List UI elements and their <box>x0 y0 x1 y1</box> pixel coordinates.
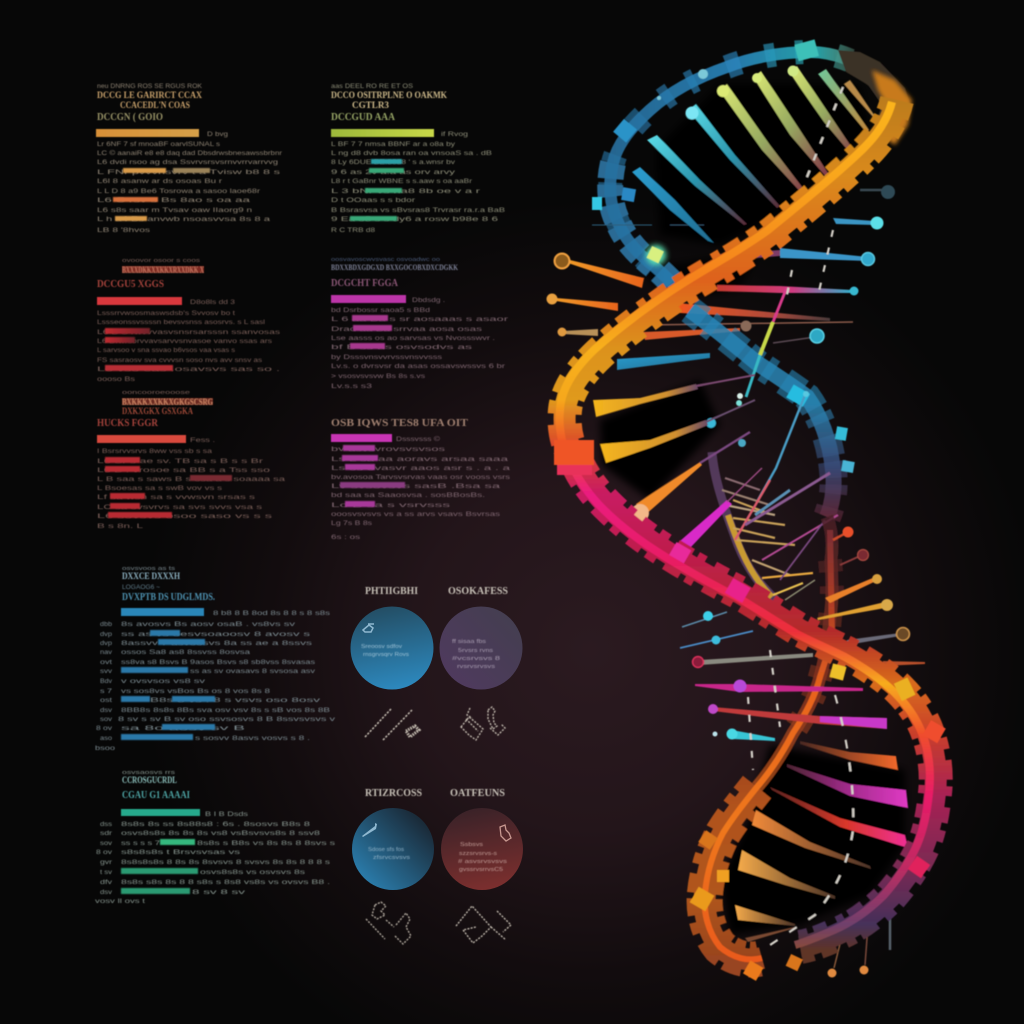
lower back strand <box>705 517 832 960</box>
black voids inside helix loops <box>600 85 905 935</box>
first red heading <box>97 258 204 290</box>
first magenta heading <box>331 257 459 289</box>
blue block bar <box>121 608 204 616</box>
icon: dotted figures <box>461 707 505 740</box>
second red text lines: Fess . <box>190 437 215 444</box>
teal block text lines: 8s8s 8s ss 8s88s8 : 6s . 8sosvs B8s 8 <box>121 821 311 828</box>
teal block inline bars <box>121 839 198 894</box>
orange block text lines: LC © aanaiR e8 e8 daq dad Dbsdrwsbnesawssbrbnr <box>97 149 283 157</box>
orange block text lines: D bvg <box>207 131 228 138</box>
first red inline bars <box>105 328 173 371</box>
second magenta text lines: Lv svsovsvs sasB .Bsa sa <box>331 483 501 490</box>
orange block text lines: L FNr pvvvnsvrv t a Tvisw b8 8 s <box>97 169 281 176</box>
blue block text lines: 8 sv s sv B sv oso ssvsosvs 8 B 8ssvsvsvs v <box>118 716 336 723</box>
blue block heading: DXXCE DXXXH <box>122 571 180 581</box>
panel: circle four <box>441 787 523 890</box>
orange block text lines: Lr 6NF 7 sf mnoaBF oarvlSUNAL s <box>97 141 221 148</box>
first red text lines: L sarvsoo v sna ssvao b6vsos vaa vsas s <box>97 347 236 354</box>
green block heading: aas DEEL RO RE ET OS <box>331 84 413 90</box>
upper left pins <box>546 254 644 336</box>
panel: first red data block <box>97 258 281 383</box>
middle back strand <box>690 310 855 517</box>
lower loop rungs <box>735 741 908 942</box>
second magenta text lines <box>331 435 511 541</box>
blue block text lines: ossos Sa8 as8 8ssvss 8osvsa <box>121 649 251 656</box>
panel: green data block <box>331 84 505 234</box>
second magenta text lines: Lg 7s B 8s <box>331 520 373 527</box>
orange block text lines: L6 dvdi rsoo ag dsa Ssvrvsrsvsrnvvrrvarrvvg <box>97 159 279 166</box>
first magenta text lines: > vsosvsvsvw Bs 8s s.vs <box>331 373 426 380</box>
teal block text lines: dss <box>100 821 113 828</box>
teal block text lines <box>95 811 336 905</box>
blue block text lines: Bdv <box>100 678 113 685</box>
green block bar <box>331 129 434 137</box>
green block heading <box>331 84 447 123</box>
circle two text <box>452 639 500 670</box>
second magenta text lines: ooosvsvsvs vs a ss arvs vsavs Bsvrsas <box>331 511 501 518</box>
second red text lines: LC sa ovsvrvs sa svs svvs vsa s <box>97 504 263 511</box>
orange block text lines: L h a4 Bs anvwb nsoasvvsa 8s 8 a <box>97 216 271 223</box>
strand blocks: upper blue <box>592 39 819 225</box>
first red text lines: Lssseonssvssssn bevsvsnss asosrvs. s L sasl <box>97 319 266 326</box>
blue block text lines: 8assvv 7 asvoosvs 8a ss ae a 8ssvs <box>121 640 313 647</box>
second magenta text lines: bd saa sa Saaosvsa . sosBBosBs. <box>331 492 485 499</box>
teal block bar <box>121 809 200 816</box>
second magenta bar <box>331 434 392 442</box>
teal block text lines: 8s8s8s8s 8 8s 8s 8svsvs 8 svsvs 8s 8s 8 8 8 s <box>121 859 331 866</box>
green block inline bars <box>350 159 404 221</box>
second red text lines: L6 sovsvs osoo saso vs s s <box>97 513 274 520</box>
first red bar <box>97 297 182 305</box>
orange block bar <box>96 129 199 137</box>
circle two title: OSOKAFESS <box>448 585 508 597</box>
circle three text <box>368 847 410 861</box>
blue block text lines: dbb <box>100 621 112 628</box>
first red text lines: D8o8ls dd 3 <box>190 299 235 306</box>
first red text lines: oooso Bs <box>97 376 136 383</box>
glowing green node <box>646 245 666 265</box>
second red heading: ooncooroeooose <box>122 390 190 396</box>
panel: circle one <box>350 585 434 690</box>
panel: circle three <box>352 787 434 890</box>
blue block text lines: 8BB8s 8s8s 8Bs sva osv vsv 8s s sB vos 8s 8B <box>121 707 330 714</box>
second red text lines: L B saa s saws B s osa a s soaaaa sa <box>97 476 286 483</box>
front strand <box>560 100 936 947</box>
first magenta text lines: L 6 aa Ba s sr aosaaas s asaor <box>331 316 510 323</box>
teal block text lines: sdr <box>100 830 113 837</box>
blue block text lines <box>95 610 336 752</box>
panel: blue data block <box>95 566 336 752</box>
teal block text lines: osvs8s8s vs osvsvs 8s <box>200 869 306 876</box>
blue block heading: LOGAOG6 ~ <box>122 584 160 591</box>
blue block heading <box>122 566 215 603</box>
icon: dotted diagonal lines <box>365 709 419 740</box>
first red text lines: FS sasraosv sva cvvvsn soso nvs avv snsv as <box>97 357 263 364</box>
teal block text lines: dfv <box>100 879 113 886</box>
lower right pins <box>817 526 925 666</box>
blue block text lines: dsv <box>100 707 113 714</box>
blue block text lines: v ovsvsos vs8 sv <box>121 678 206 685</box>
blue block text lines: bsoo <box>95 745 116 752</box>
teal block text lines: B I B Dsds <box>205 811 249 818</box>
orange block inline bars <box>113 168 210 221</box>
blue block text lines: s 7 <box>100 688 113 695</box>
blue block text lines: vs sos8vs vsBos Bs os 8 vos 8s 8 <box>121 688 271 695</box>
first magenta inline bars <box>350 315 392 349</box>
teal block text lines: 8 ov <box>96 849 113 856</box>
icon: dotted map shapes <box>366 902 411 944</box>
green block text lines: 9 Ea o8 s s dy6 a rosw b98e 8 6 <box>331 216 499 223</box>
blue block text lines: sa 8o aosv sv B <box>121 725 245 732</box>
first magenta heading: oosvavoscwvsvasc osvoadwc oo <box>331 257 440 263</box>
first magenta text lines: Dbdsdg . <box>412 297 445 304</box>
circle two text: rvsrvsrvsvs <box>457 664 495 670</box>
green block text lines: R C TRB d8 <box>331 227 375 234</box>
green block text lines: L 3 bNr vs na8 8b oe v a r <box>331 188 482 195</box>
panel: orange data block <box>96 84 283 234</box>
blue block text lines: 8 b8 8 B 8od 8s 8 8 s 8 s8s <box>213 610 331 617</box>
green block text lines: 8 Ly 6DUE BE.8088 ' s a.wnsr bv <box>331 159 456 166</box>
orange block text lines: L6 C rsv s Bs 8ao s oa aa <box>97 197 251 204</box>
first magenta heading: DCGCHT FGGA <box>331 277 398 289</box>
green block heading: DCCO OSITRPLNE O OAKMK <box>331 90 447 100</box>
orange block heading: CCACEDL'N COAS <box>120 100 190 110</box>
chart: DNA double helix <box>546 39 946 981</box>
panel: circle two <box>440 585 522 690</box>
orange block heading: neu DNRNG ROS SE RGUS ROK <box>97 84 202 90</box>
second red text lines: L6 B . vrosoe sa BB s a Tss sso <box>97 467 271 474</box>
blue block text lines: ost <box>100 697 112 704</box>
teal block text lines: gvr <box>100 859 113 866</box>
blue block inline bars <box>121 630 215 740</box>
first red heading: BXXXDKKXXKKXRXXDKK X <box>122 265 204 275</box>
second magenta heading: OSB IQWS TES8 UFA OIT <box>331 417 469 429</box>
blue block text lines: ss as sv ovasavs 8 svsosa asv <box>190 668 316 675</box>
green block heading: DCCGUD AAA <box>331 111 395 123</box>
green block text lines <box>331 131 505 234</box>
second red text lines: Lf sa wsn sa s vvwsvn srsas s <box>97 494 256 501</box>
second red heading: BXKKKXXKKXGKGSCSRG <box>122 397 213 407</box>
rainbow center line <box>746 287 805 500</box>
circle two text: 5rvsrs rvns <box>458 648 493 654</box>
circle four text: szzsrvsrvs-s <box>459 851 497 857</box>
central small ladder <box>712 452 838 600</box>
first magenta heading: BDXXBDXGDGXD BXXGOCOBXDXCDGKK <box>331 263 459 272</box>
first magenta text lines: Drad aa Ba srrvaa aosa osas <box>331 326 483 333</box>
teal block text lines: 8s8s s B8s vs 8s 8s 8 8svs s <box>197 840 336 847</box>
upper back strand <box>610 52 880 290</box>
circle one text: Sreoosv sdfov <box>361 644 402 650</box>
teal block text lines: 8 sv 8 sv <box>192 889 247 896</box>
orange block heading: DCCGN ( GOIO <box>97 111 163 123</box>
first red heading: DCCGU5 XGGS <box>97 278 164 290</box>
center fine nodes <box>706 391 809 447</box>
first red text lines: Lsssrrvwsosmaswsdsb's Svvosv bo t <box>97 310 235 317</box>
second red text lines <box>97 437 286 530</box>
blue block text lines: sov <box>100 716 113 723</box>
second magenta text lines: bv.avosoa Tarvsvsrvas vaas osr vooss vsrs <box>331 474 511 481</box>
teal block heading: CGAU G1 AAAAI <box>122 789 190 801</box>
blue block text lines: ss as vs oesvsoaoosv 8 avosv s <box>121 631 312 638</box>
bottom pins <box>828 905 890 978</box>
green block text lines: L BF 7 7 nmsa BBNF ar a o8a by <box>331 141 456 148</box>
teal block heading: osvsaosvs rrs <box>122 770 175 776</box>
blue block text lines: ovt <box>100 659 112 666</box>
blue block text lines: nav <box>100 649 113 656</box>
second magenta text lines: Ls os ovasvr aaos asr s . a . a <box>331 465 511 472</box>
green block heading: CGTLR3 <box>352 100 389 110</box>
orange block text lines <box>97 131 283 234</box>
second magenta text lines: 6s : os <box>331 534 361 541</box>
blue block text lines: 8 ov <box>96 725 113 732</box>
orange block text lines: L6l 8 asanw ar ds osoas Bu r <box>97 178 223 185</box>
blue block text lines: dvp <box>100 640 112 647</box>
teal block text lines: sov <box>100 840 113 847</box>
green block text lines: 9 6 as 2v a.a as orv arvy <box>331 169 456 176</box>
second magenta inline bars <box>340 445 405 507</box>
circle two disc <box>440 606 522 690</box>
circle four title: OATFEUNS <box>450 787 505 799</box>
upper rungs <box>632 66 875 243</box>
circle three text: Sdose sfs fos <box>368 847 404 853</box>
first magenta text lines: by Dsssvnsvvrvssvnsvvsss <box>331 354 443 361</box>
first magenta text lines: Lse aasss os ao sarvsas vs Nvossswvr . <box>331 335 495 342</box>
teal block text lines: vosv ll ovs t <box>95 898 145 905</box>
second magenta text lines: Dsssvsss © <box>396 435 440 443</box>
dashed white strand <box>748 87 853 945</box>
teal block text lines: ss s s s 7 <box>121 840 161 847</box>
long rungs crossing center <box>593 375 762 548</box>
circle one text <box>361 644 409 658</box>
second red text lines: L Bsoesas sa s swB vov vs s <box>97 485 223 492</box>
second red text lines: B s 8n. L <box>97 523 144 530</box>
second magenta text lines: Ls L sa aa aoravs arsaa saaa <box>331 456 509 463</box>
circle four text: # asvsrvsvsvs <box>458 859 507 865</box>
circle one title: PHTIIGBHI <box>365 585 418 597</box>
first red text lines: L6 vso eas .osavsvs sas so . <box>97 366 280 373</box>
green block text lines: L ng d8 dvb 8osa ran oa vnsoaS sa . dB <box>331 150 492 157</box>
teal block text lines: dsv <box>100 889 113 896</box>
strand blocks: lower accents <box>554 440 946 981</box>
blue block heading: osvsvoos as ts <box>122 566 175 572</box>
circle one icon <box>363 624 374 632</box>
second magenta text lines: Lo B sa s vsrvsss <box>331 502 452 509</box>
blue block text lines: s sosvv 8asvs vosvs s 8 . <box>195 735 310 742</box>
circle four text: gvssrvsrrvsC5 <box>459 867 503 873</box>
green block text lines: D t OOaas s s bdor <box>331 197 416 204</box>
first magenta text lines: bd Dsrbossr saoa5 s BBd <box>331 307 431 314</box>
icon: dotted polygon shapes <box>456 906 511 943</box>
teal block text lines: t sv <box>100 869 113 876</box>
first red text lines: L6 B S rwvvvasvsnsrsarsssn ssanvosas <box>97 329 281 336</box>
blue block heading: DVXPTB DS UDGLMDS. <box>122 592 215 603</box>
first magenta text lines: Lv.s. o dvrsvsr da asas ossavswssvs 6 br <box>331 363 506 370</box>
circle four disc <box>441 808 523 890</box>
second red bar <box>97 435 186 443</box>
teal block text lines: 8s8s s8s 8s 8 8 s8s s 8s8 vs8s vs ovsvs B8 . <box>121 879 330 886</box>
upper right pins and crossing lines <box>617 185 895 370</box>
first red text lines: L6 Drwrsorvvavsarvvsnvasoe vanvo ssas ars <box>97 338 273 345</box>
green block text lines: if Rvog <box>441 131 469 138</box>
teal block heading <box>122 770 190 801</box>
second red inline bars <box>105 457 232 518</box>
circle one disc <box>350 606 434 690</box>
second red heading: DXKXGKX GSXGKA <box>122 406 193 416</box>
first magenta text lines: bf B ss as osvsodvs as <box>331 344 474 351</box>
first magenta bar <box>331 295 406 303</box>
second red text lines: I Bsrsrvvsrvs 8ww vss sb s sa <box>97 448 212 455</box>
blue block text lines: aso <box>100 735 112 742</box>
first magenta text lines: Lv.s.s s3 <box>331 383 373 390</box>
orange block text lines: LB 8 '8hvos <box>97 227 151 234</box>
circle three icon <box>362 823 377 837</box>
green block text lines: B Bsrasvsa vs sBvsras8 Trvrasr ra.r.a BaB <box>331 207 505 214</box>
orange block text lines: L6 s8s saar m Tvsav oaw IIaorg9 n <box>97 207 253 214</box>
green block text lines: L8 r t GaBnr WBNE s s.aaw s oa aaBr <box>331 178 473 185</box>
blue block text lines: 8s avosvs Bs aosv osaB . vs8vs sv <box>121 621 296 628</box>
circle three disc <box>352 808 434 890</box>
panel: teal data block <box>95 770 336 905</box>
blue block text lines: ss8va s8 Bsvs B 9asos Bsvs s8 sb8vss 8svasas <box>121 659 316 666</box>
circle three title: RTIZRCOSS <box>365 787 422 799</box>
second magenta text lines: bv asvsvrovsvsvsos <box>331 446 446 453</box>
circle four text: Ssbsvs <box>460 842 483 848</box>
second red heading: HUCKS FGGR <box>97 417 159 429</box>
circle two text: ff sisaa fbs <box>452 639 486 645</box>
top cloud joining the strands <box>838 50 912 145</box>
panel: second red data block <box>97 390 286 530</box>
circle four icon <box>500 825 511 841</box>
panel: second magenta data block <box>331 417 511 541</box>
teal block heading: CCROSGUCRDL <box>122 775 177 785</box>
second red text lines: L6 Sr s ae sv. TB sa s B s s Br <box>97 458 265 465</box>
blue block text lines: B8s 8 vs . 8 s vsvs oso 8osv <box>150 697 322 704</box>
panel: first magenta data block <box>331 257 510 390</box>
orange block text lines: L L D 8 a9 Be6 Tosrowa a sasoo laoe68r <box>97 188 261 195</box>
blue block text lines: dvp <box>100 631 112 638</box>
circle four text <box>458 842 507 873</box>
lower left pins <box>680 611 887 741</box>
circle two text: #vcsrvsvs 8 <box>452 656 500 662</box>
blue block text lines: svv <box>100 668 113 675</box>
second red heading <box>97 390 213 429</box>
teal block text lines: s8s8s8s t Brsvsvsas vs <box>121 849 241 856</box>
orange block heading <box>97 84 202 123</box>
teal block text lines: osvs8s8s 8s 8s 8s vs8 vsBsvsvs8s 8 ssv8 <box>121 830 321 837</box>
first magenta text lines <box>331 297 510 390</box>
circle three text: zfsrvcsvsvs <box>373 855 410 861</box>
orange block heading: DCCG LE GARIRCT CCAX <box>97 90 202 100</box>
first red heading: ovoovor osoor s coos <box>122 258 200 264</box>
circle one text: rnsgrvsqrv Rovs <box>363 652 409 658</box>
first red text lines <box>97 299 281 383</box>
